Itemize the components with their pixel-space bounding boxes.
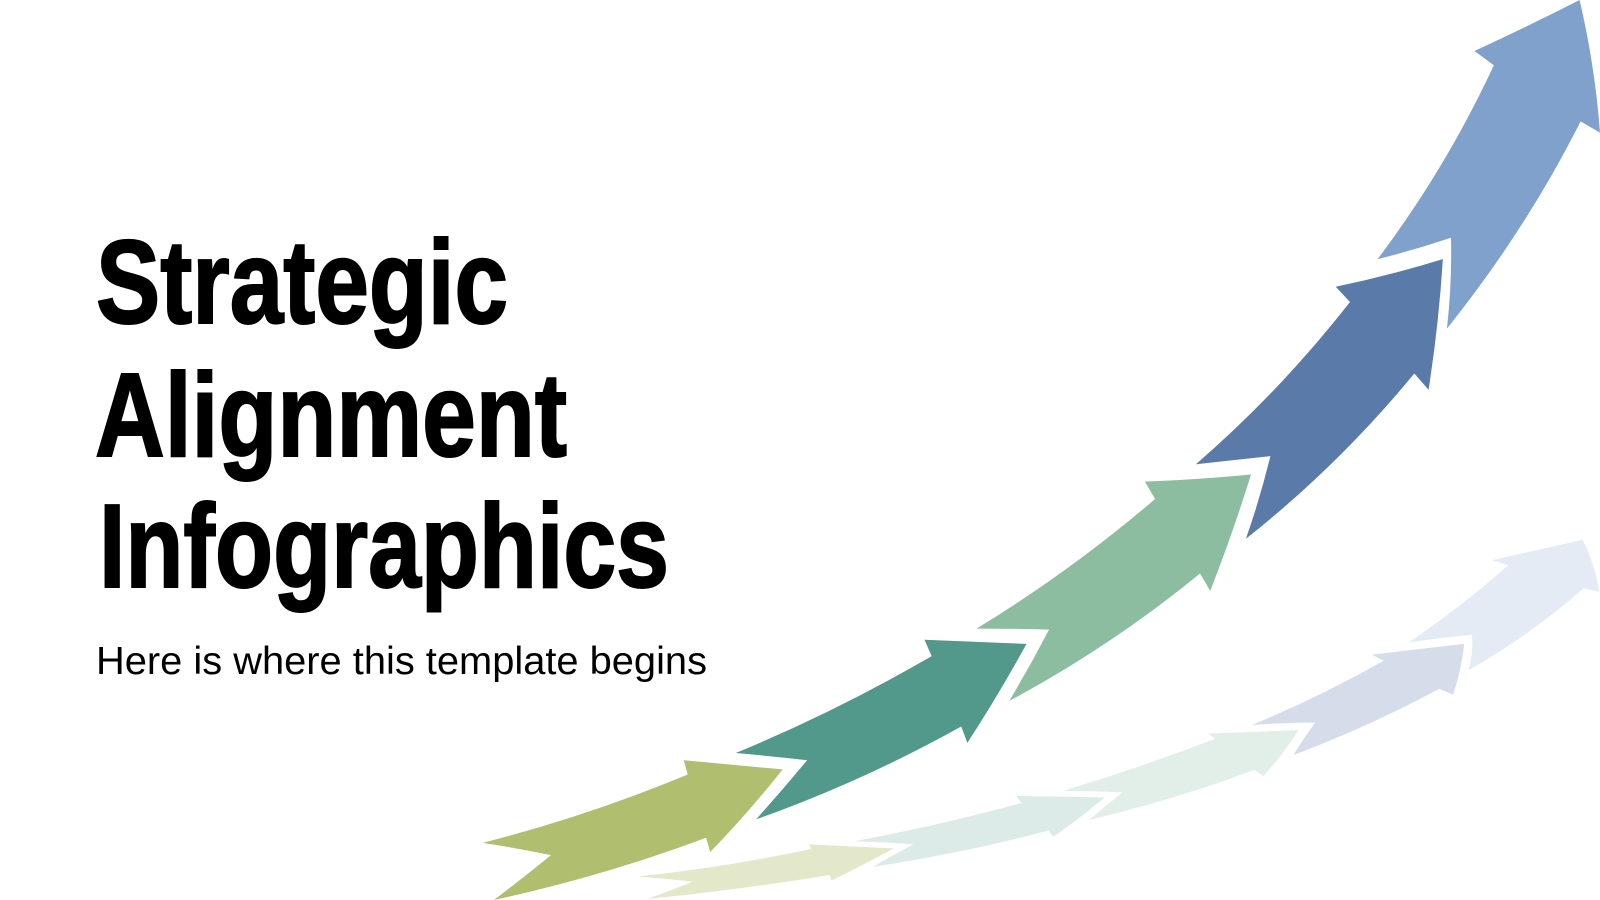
main arrow chain bbox=[483, 0, 1600, 900]
arrow: light green bbox=[977, 474, 1251, 701]
subtitle: Here is where this template begins bbox=[96, 640, 707, 683]
arrow: pale periwinkle bbox=[1252, 644, 1464, 755]
arrow: pale olive bbox=[638, 844, 894, 899]
arrow: pale green bbox=[1063, 730, 1298, 820]
arrow: dark blue bbox=[1196, 259, 1443, 539]
title line 3: Infographics bbox=[99, 480, 669, 613]
arrow: teal bbox=[736, 640, 1027, 819]
title line 2: Alignment bbox=[95, 349, 567, 482]
arrow: pale teal bbox=[854, 796, 1105, 867]
arrow: light blue bbox=[1378, 0, 1600, 329]
title bbox=[95, 216, 669, 613]
title line 1: Strategic bbox=[96, 216, 508, 349]
arrow: pale blue bbox=[1409, 540, 1599, 670]
faded arrow chain bbox=[638, 540, 1599, 899]
arrow: olive bbox=[483, 760, 783, 900]
